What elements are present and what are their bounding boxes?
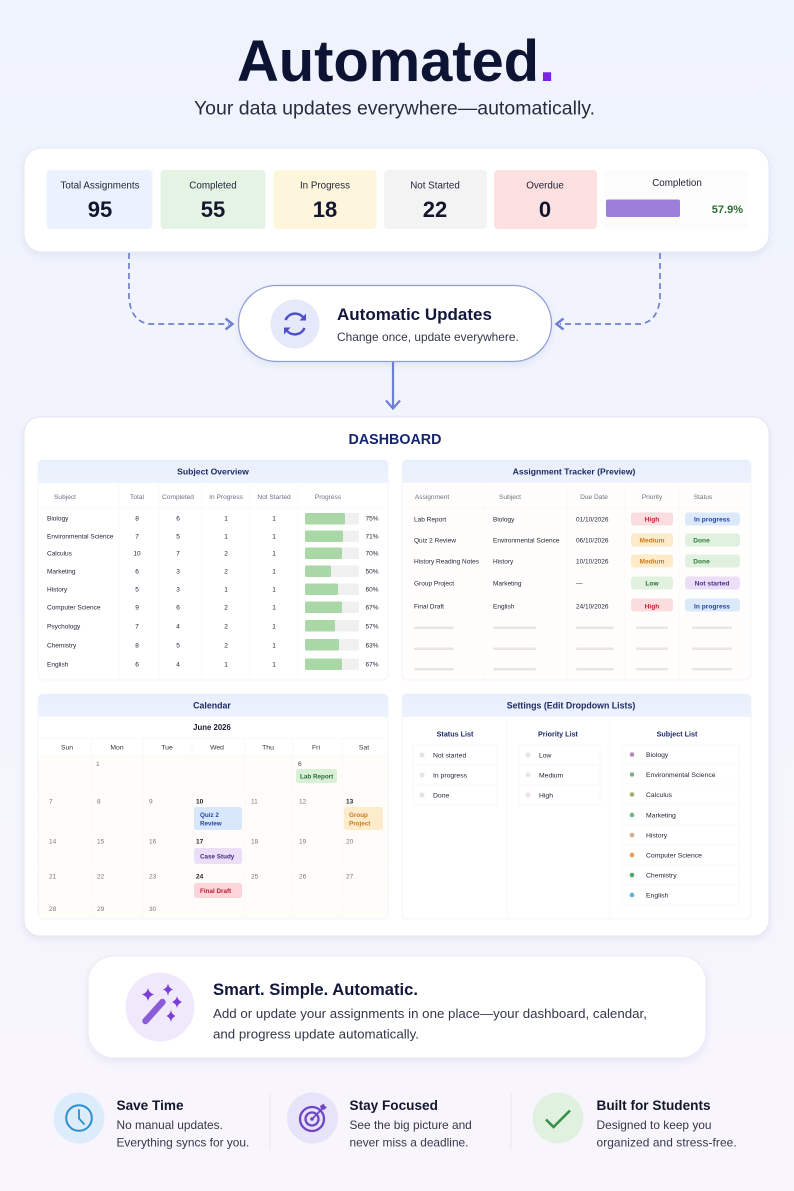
row: Environmental Science: 71% [365,534,379,540]
row: Environmental Science: 1 [272,534,276,540]
row: Calculus: 70% [365,550,379,558]
row: Lab Report: Lab Report [414,516,446,524]
row: Group Project: — [576,580,583,588]
calendar dates: 12 [299,798,307,806]
table header: Due Date [580,494,608,501]
row: Chemistry: Chemistry [47,642,77,650]
subject list: History [646,832,668,840]
stat: total assignments: 95 [88,197,112,222]
icon: target [287,1092,338,1144]
panel: dashboard [24,417,769,936]
calendar dates: 8 [97,798,101,806]
row: Computer Science [47,602,379,613]
row: Final Draft: 24/10/2026 [576,604,609,610]
subject list: Biology [646,752,669,759]
event: Quiz 2 Review: Quiz 2 [200,812,219,819]
row: Biology: 8 [135,516,139,522]
row: History Reading Notes: Done [693,558,710,566]
stat: in progress: In Progress [300,180,350,192]
panel: calendar [38,694,388,919]
panel: smart simple automatic: Add or update your assignments in one place—your dashboard, calendar, [213,1006,647,1021]
row: Quiz 2 Review [414,534,740,546]
panel: calendar: Calendar [193,700,231,710]
row: History [47,584,379,595]
stat: completion progress: Completion [652,178,702,189]
event: Final Draft: Final Draft [200,888,232,895]
row: Quiz 2 Review: Environmental Science [493,538,560,544]
row: Lab Report: In progress [694,516,730,524]
table header: Status [694,494,713,501]
status list: Status List [437,730,474,738]
arrow: summary to updates (left) [129,253,232,330]
feature: built for students: organized and stress-free. [596,1136,737,1150]
panel: assignment tracker [402,460,751,680]
event: Lab Report: Lab Report [300,774,334,780]
row: Biology: 1 [224,516,228,522]
stat: completed: 55 [201,197,225,222]
row: History: 1 [272,586,276,594]
priority list: High [539,792,553,800]
table header: Not Started [257,494,291,501]
row: Psychology [47,620,379,632]
row: English: 4 [176,662,180,668]
feature: stay focused: See the big picture and [350,1118,472,1132]
table header: Subject [54,494,76,501]
subtitle: Your data updates everywhere—automatically. [194,98,595,120]
stat: total assignments: Total Assignments [61,180,140,192]
priority list: Priority List [538,730,579,738]
calendar dates: 6 [298,761,302,768]
subject list: Environmental Science [646,772,716,779]
row: Chemistry: 63% [365,642,379,650]
event: Case Study [194,848,242,864]
row: Psychology: 7 [135,624,139,630]
panel: smart simple automatic [88,956,706,1058]
status list: Done [433,792,449,800]
stat: overdue: Overdue [526,180,564,192]
calendar dates: 16 [149,838,157,846]
stat: completion progress: 57.9% [712,204,743,216]
icon: clock [54,1092,104,1144]
row: History Reading Notes: History Reading Notes [414,558,480,566]
row: Psychology: 57% [365,624,379,630]
weekday headers: Sun [61,744,73,752]
calendar dates: 18 [251,838,259,846]
panel: assignment tracker: Assignment Tracker (Preview) [513,466,636,476]
stat: completion progress [604,170,748,229]
subject list: Computer Science [646,852,702,860]
row: History: 60% [365,586,379,594]
row: Biology: Biology [47,516,69,522]
row: Marketing: 50% [365,568,379,576]
table header: In Progress [209,494,244,501]
row: Calculus: 1 [272,550,276,558]
status list [413,730,497,805]
row: Environmental Science: 1 [224,534,228,540]
status list: In progress [433,772,468,780]
row: Environmental Science [47,530,379,542]
weekday headers: Tue [161,744,173,752]
row: Marketing: 1 [272,568,276,576]
row: English: 1 [272,662,276,668]
row: Psychology: 1 [272,624,276,630]
stat: not started [384,170,487,229]
row: Lab Report: 01/10/2026 [576,516,609,524]
row: English: 67% [365,662,379,668]
row: History: 3 [176,586,180,594]
table header: Completed [162,494,194,501]
row: Lab Report: Biology [493,516,515,524]
row: English: English [47,662,69,668]
row: Psychology: 4 [176,624,180,630]
event: Group Project: Group [349,812,368,819]
panel: settings [402,694,751,919]
row: Computer Science: 1 [272,604,276,612]
row: Calculus [47,548,379,559]
feature: stay focused [287,1092,472,1150]
calendar dates: 27 [346,874,354,880]
weekday headers: Mon [110,744,124,752]
row: Calculus: Calculus [47,550,73,558]
calendar dates: 20 [346,838,354,846]
row: Chemistry: 2 [224,642,228,650]
row: Group Project [414,576,740,590]
row: English: 6 [135,662,139,668]
panel: settings: Settings (Edit Dropdown Lists) [507,700,635,710]
calendar dates: 25 [251,874,259,880]
table header: Priority [642,494,663,501]
dashboard heading: DASHBOARD [349,432,441,448]
callout: automatic updates: Automatic Updates [337,305,492,324]
calendar dates: 29 [97,906,105,913]
stat: not started: 22 [423,197,447,222]
calendar dates: 9 [149,798,153,806]
stat: overdue: 0 [539,197,551,222]
arrow: updates to dashboard [386,362,400,408]
stat: total assignments [46,170,152,229]
row: Marketing: 6 [135,568,139,576]
row: Biology [47,513,379,524]
row: Computer Science: 9 [135,604,139,612]
feature: built for students [532,1092,737,1150]
panel: calendar: June 2026 [193,723,232,732]
feature: save time: Save Time [116,1098,184,1113]
row: Final Draft [414,598,740,612]
calendar dates: 13 [346,798,354,806]
row: Marketing: 2 [224,568,228,576]
event: Group Project: Project [349,820,371,828]
icon: check mark [532,1092,584,1144]
callout: automatic updates: Change once, update everywhere. [337,330,519,344]
calendar dates: 30 [149,906,157,913]
row: History Reading Notes [414,554,740,568]
subject list: English [646,892,669,900]
weekday headers: Wed [210,744,224,752]
calendar dates: 11 [251,798,258,806]
event: Quiz 2 Review: Review [200,820,222,828]
subject list: Subject List [657,730,698,738]
subject list: Marketing [646,812,676,820]
calendar dates [49,761,354,913]
row: Computer Science: 2 [224,604,228,612]
row: Group Project: Not started [695,580,729,588]
row: Computer Science: 6 [176,604,180,612]
row: Environmental Science: Environmental Science [47,534,114,540]
row: Chemistry [47,639,379,650]
table header: Assignment [415,494,449,501]
row: History: 1 [224,586,228,594]
icon: magic wand [126,972,194,1042]
stat: in progress: 18 [313,197,337,222]
priority list: Low [539,752,552,760]
row: Environmental Science: 5 [176,534,180,540]
feature: stay focused: Stay Focused [350,1098,438,1113]
row: Final Draft: Final Draft [414,604,444,610]
feature: save time: No manual updates. [116,1118,223,1132]
table header [415,494,713,501]
row: Environmental Science: 7 [135,534,139,540]
event: Lab Report [296,769,337,783]
calendar dates: 14 [49,838,57,846]
panel: subject overview [38,460,388,680]
row: Final Draft: High [645,604,659,610]
priority list [519,730,600,805]
row: Chemistry: 1 [272,642,276,650]
feature: save time: Everything syncs for you. [116,1136,249,1150]
stat: not started: Not Started [410,180,460,192]
icon: sync [270,300,320,348]
table header: Progress [315,494,342,501]
row: Marketing [47,566,379,577]
row: Group Project: Group Project [414,580,454,588]
row: Marketing: 3 [176,568,180,576]
row: History Reading Notes: History [493,558,514,566]
panel: smart simple automatic: and progress update automatically. [213,1026,419,1042]
subject list [622,730,739,905]
panel: smart simple automatic: Smart. Simple. Automatic. [213,980,418,999]
row: Calculus: 7 [176,550,180,558]
priority list: Medium [539,772,564,780]
row: History: 5 [135,586,139,594]
stat: overdue [494,170,597,229]
table header: Total [130,494,144,501]
event: Final Draft [194,883,242,898]
arrow: summary to updates (right) [556,253,660,330]
row: Quiz 2 Review: 06/10/2026 [576,538,609,544]
row: Group Project: Low [645,580,659,588]
weekday headers: Fri [312,744,320,752]
panel: summary statistics [24,148,769,252]
event: Quiz 2 Review [194,807,242,830]
row: Psychology: 2 [224,624,228,630]
row: Biology: 75% [365,516,379,522]
row: Final Draft: English [493,604,515,610]
feature: built for students: Built for Students [596,1098,711,1113]
row: Final Draft: In progress [694,604,730,610]
weekday headers: Thu [262,744,274,752]
row: History Reading Notes: Medium [640,558,665,566]
table header: Subject [499,494,521,501]
subject list: Chemistry [646,872,677,880]
stat: in progress [274,170,376,229]
subject list: Calculus [646,792,673,799]
event: Case Study: Case Study [200,854,235,860]
calendar dates: 23 [149,874,157,880]
row: English: 1 [224,662,228,668]
feature: stay focused: never miss a deadline. [350,1136,468,1150]
calendar dates: 1 [96,761,100,768]
status list: Not started [433,752,466,760]
row: Quiz 2 Review: Medium [640,538,665,544]
feature: built for students: Designed to keep you [596,1118,712,1132]
row: Chemistry: 8 [135,642,139,650]
calendar dates: 24 [196,874,204,880]
weekday headers: Sat [359,744,369,752]
row: Lab Report: High [645,516,659,524]
row: Biology: 1 [272,516,276,522]
row: Quiz 2 Review: Quiz 2 Review [414,538,456,544]
row: Quiz 2 Review: Done [693,538,710,544]
row: Lab Report [414,512,740,526]
calendar dates: 7 [49,798,53,806]
calendar dates: 22 [97,874,105,880]
row: Group Project: Marketing [493,580,522,588]
weekday headers [61,744,369,752]
callout: automatic updates [238,286,552,362]
row: English [47,658,379,670]
calendar dates: 19 [299,838,307,846]
row: Calculus: 2 [224,550,228,558]
row: History Reading Notes: 10/10/2026 [576,558,609,566]
row: Biology: 6 [176,516,180,522]
calendar dates: 21 [49,874,57,880]
row: Computer Science: 67% [365,604,379,612]
title: Automated. [237,29,555,94]
row: Calculus: 10 [133,550,141,558]
calendar dates: 26 [299,874,307,880]
event: Group Project [344,807,383,830]
stat: completed: Completed [189,180,237,192]
row: History: History [47,586,68,594]
calendar dates: 17 [196,838,204,846]
stat: completed [160,170,266,229]
panel: subject overview: Subject Overview [177,466,249,476]
row: Marketing: Marketing [47,568,76,576]
calendar dates: 15 [97,838,105,846]
empty placeholder rows [414,626,732,670]
table header [54,494,342,501]
row: Computer Science: Computer Science [47,604,101,612]
feature: save time [54,1092,249,1150]
calendar dates: 10 [196,798,204,806]
row: Chemistry: 5 [176,642,180,650]
calendar dates: 28 [49,906,57,913]
row: Psychology: Psychology [47,624,81,630]
